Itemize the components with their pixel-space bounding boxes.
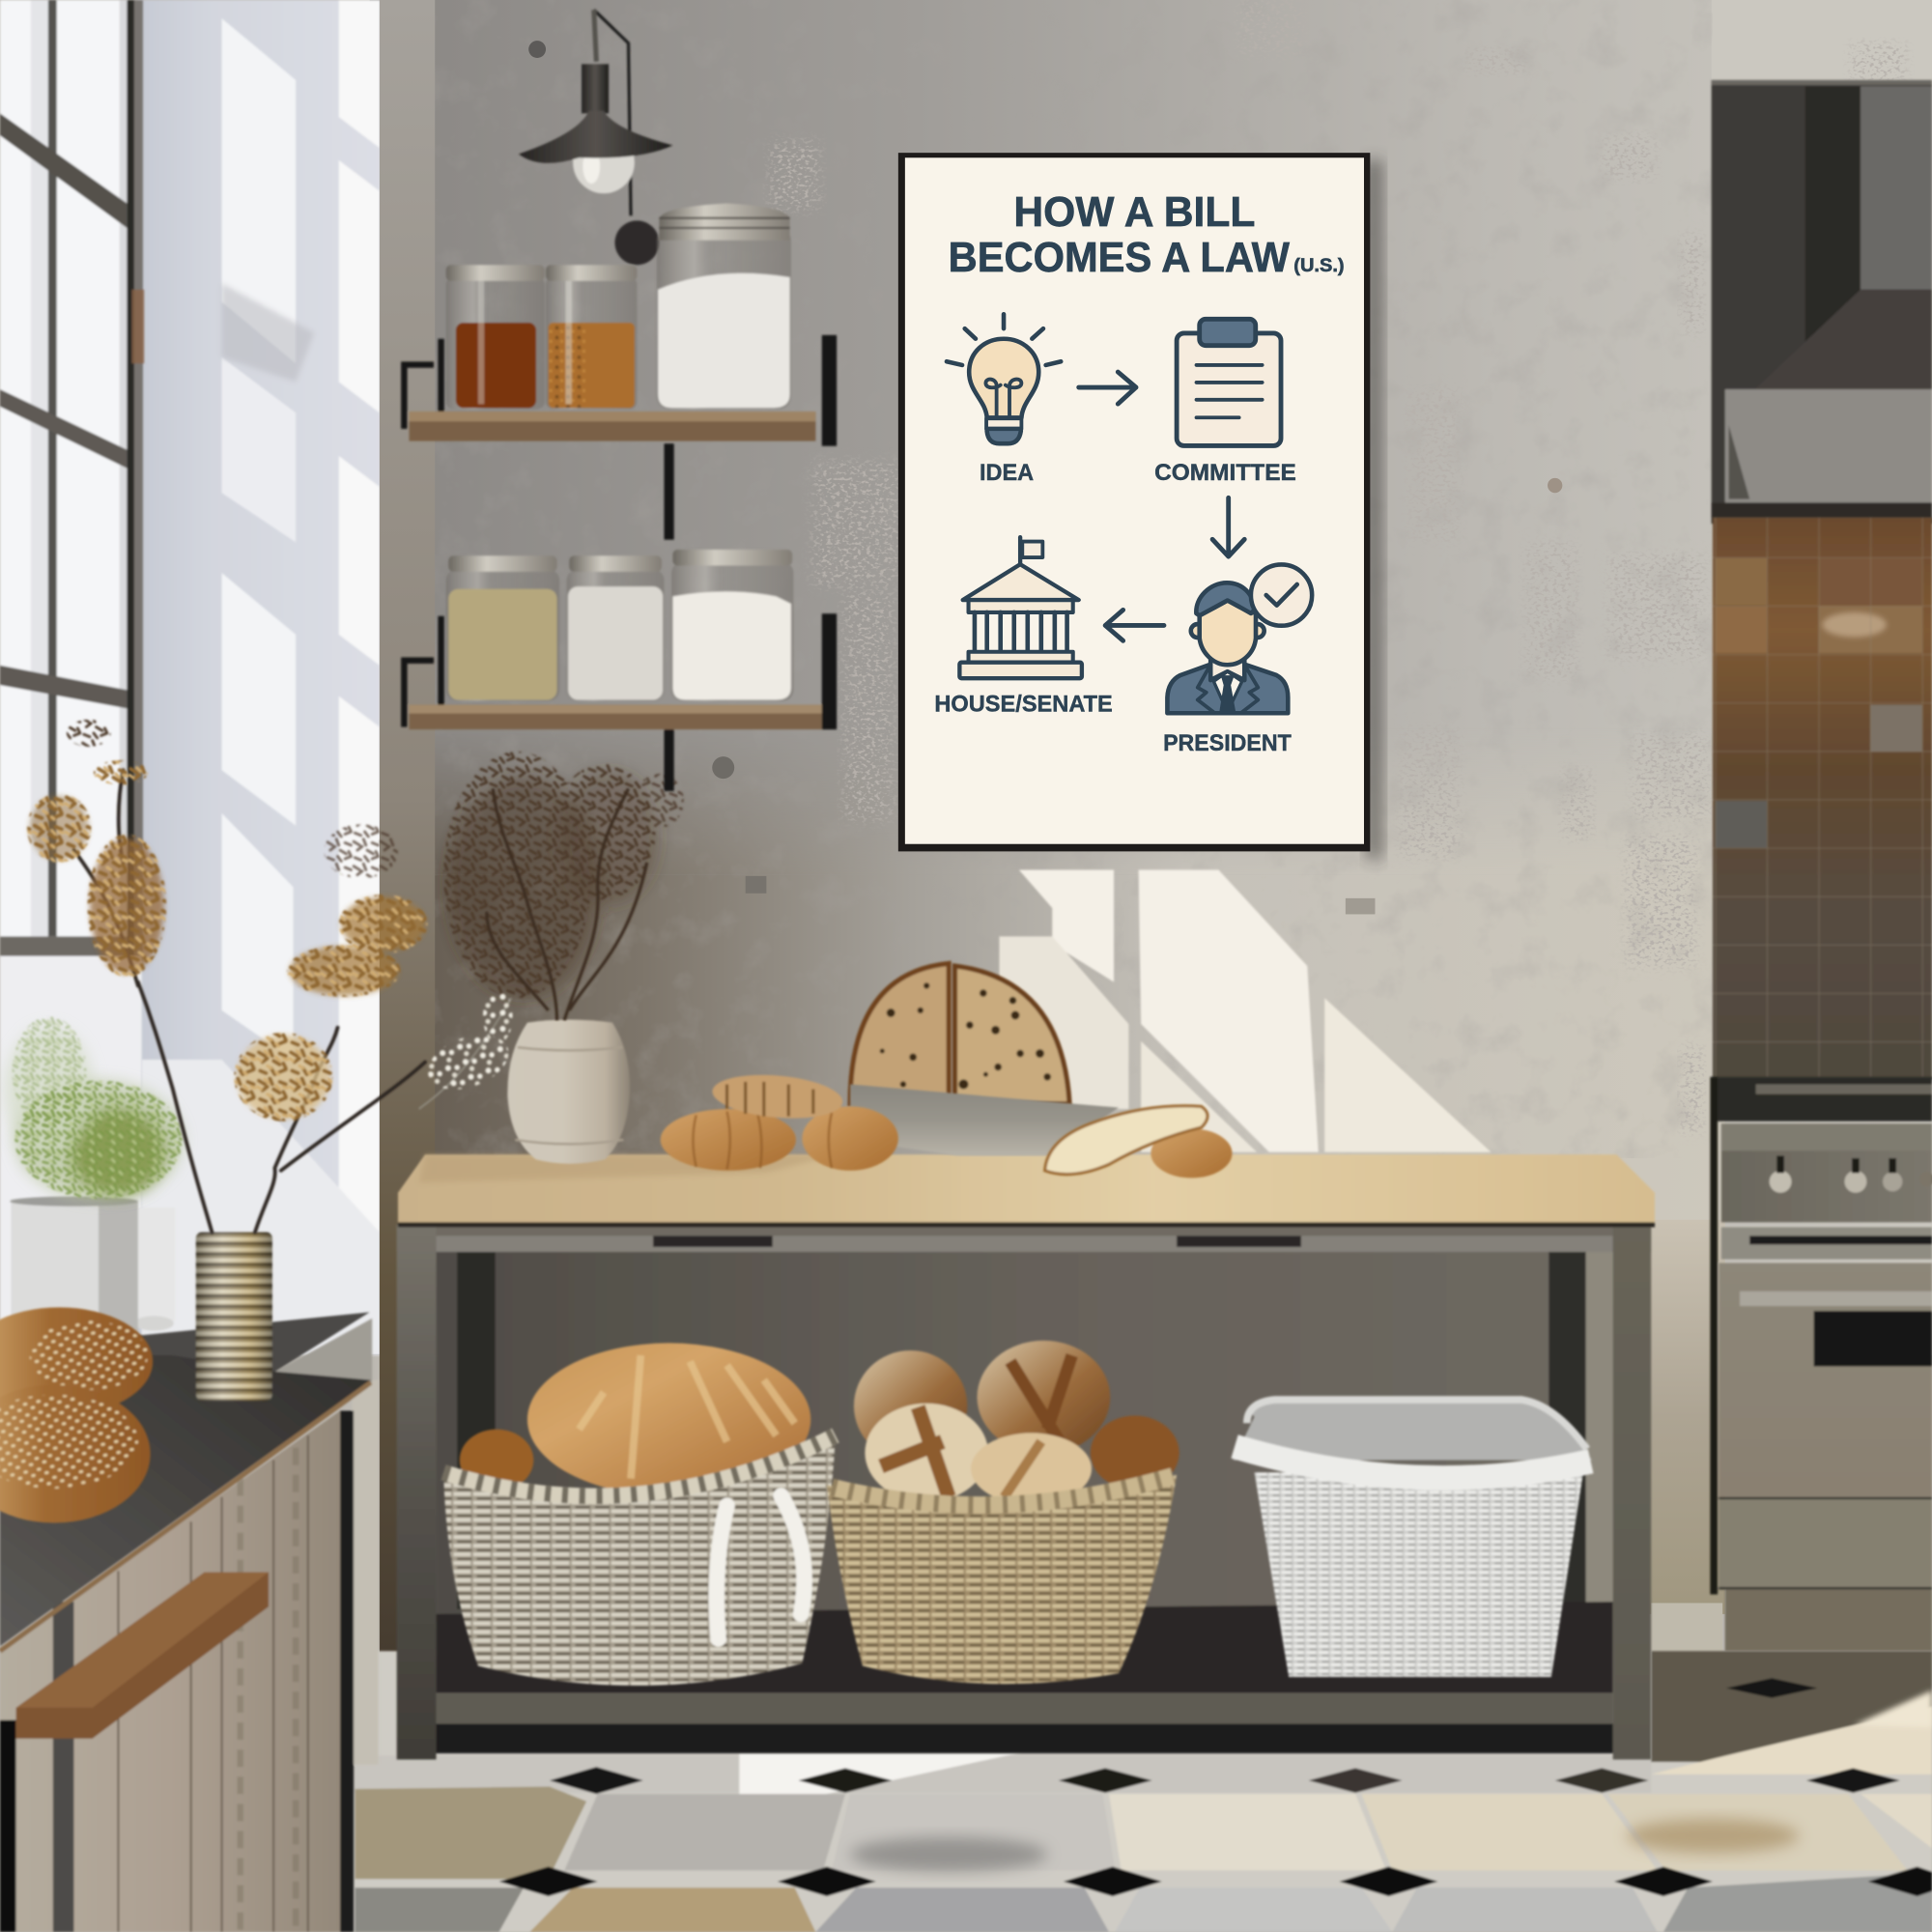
icon: clipboard: [1177, 319, 1281, 445]
counter edge trim: [0, 1382, 371, 1651]
upper shelf: [404, 335, 837, 540]
title: HOW A BILL: [1013, 188, 1255, 236]
title: BECOMES A LAW: [949, 234, 1290, 281]
range hood: [1712, 80, 1932, 524]
dried flower arrangement: [27, 720, 516, 1233]
tile backsplash: [1713, 518, 1932, 1079]
sparse sprig top right: [324, 824, 398, 878]
table: [397, 1154, 1655, 1759]
title: [949, 188, 1345, 281]
knife: [850, 1084, 1119, 1155]
front leg left: [397, 1225, 437, 1759]
flower cluster middle: [88, 835, 166, 977]
flower cluster top: [67, 720, 148, 784]
cabinet leg: [53, 1602, 74, 1932]
poster shadow: [1365, 160, 1382, 858]
wall vase: [507, 1019, 630, 1164]
lower shelf rail: [437, 1693, 1613, 1723]
apron slot left: [653, 1236, 773, 1247]
loaves on counter: [0, 1307, 153, 1523]
label: house and senate: HOUSE/SENATE: [934, 692, 1113, 718]
flower cluster lower right: [234, 1033, 332, 1122]
flower cluster mid right: [287, 895, 428, 997]
counter side panel: [273, 1319, 372, 1382]
bread slice: [850, 963, 1069, 1104]
apron slot right: [1177, 1236, 1301, 1247]
jar white grain: [567, 555, 665, 701]
basket middle with loaves: [827, 1341, 1179, 1684]
jars lower shelf: [446, 550, 793, 701]
lamp: [519, 10, 672, 265]
label: committee: COMMITTEE: [1154, 460, 1296, 486]
back table leg left: [457, 1252, 496, 1609]
lower shelf surface: [437, 1602, 1613, 1693]
striped metal vase: [196, 1233, 272, 1401]
counter back edge: [138, 1312, 370, 1382]
drawer handle: [16, 1573, 269, 1739]
back table leg right: [1548, 1252, 1586, 1622]
table apron: [397, 1225, 1651, 1252]
left sunlit wall: [138, 0, 382, 1355]
flower stems: [74, 770, 425, 1233]
arrow: committee to president: [1212, 497, 1244, 556]
poster: [898, 153, 1370, 851]
front leg right: [1613, 1225, 1651, 1759]
basket left with loaf: [443, 1343, 836, 1686]
left cabinet: [0, 1312, 379, 1932]
wall background: [370, 0, 1932, 1614]
sunlight on wall: [999, 870, 1491, 1152]
floor: [352, 1651, 1932, 1932]
basket right white: [1234, 1400, 1592, 1677]
jar yellow grain: [446, 555, 559, 701]
jar white flour tall: [657, 203, 791, 409]
arrow: president to house and senate: [1105, 610, 1164, 640]
jar red spice: [446, 265, 545, 409]
cabinet front: [0, 1410, 340, 1932]
title: (U.S.): [1293, 255, 1345, 276]
window: [0, 0, 144, 1325]
wall column: [380, 0, 435, 1775]
lower shelf: [404, 613, 837, 791]
label: president: PRESIDENT: [1163, 730, 1292, 756]
white planter: [10, 1197, 175, 1331]
white sprig: [419, 989, 516, 1109]
icon: light bulb: [947, 314, 1061, 443]
kitchen range: [1710, 1077, 1932, 1651]
bread rolls: [661, 1070, 1233, 1178]
poster paper: [905, 157, 1364, 844]
label: idea: IDEA: [980, 460, 1034, 486]
jar orange grains: [546, 265, 637, 409]
green plant: [5, 1016, 183, 1199]
baseboard: [1651, 1603, 1722, 1652]
jar white flour: [671, 550, 793, 701]
arrow: idea to committee: [1079, 372, 1136, 404]
flower cluster upper left: [27, 793, 91, 863]
jars upper shelf: [446, 203, 791, 409]
icon: president with check badge: [1167, 564, 1312, 713]
cabinet side panel: [353, 1380, 379, 1765]
poster frame: [898, 153, 1370, 851]
counter top: [0, 1355, 371, 1646]
dried branches in wall vase: [443, 752, 684, 1020]
icon: capitol building: [959, 537, 1082, 678]
table top: [398, 1154, 1655, 1224]
